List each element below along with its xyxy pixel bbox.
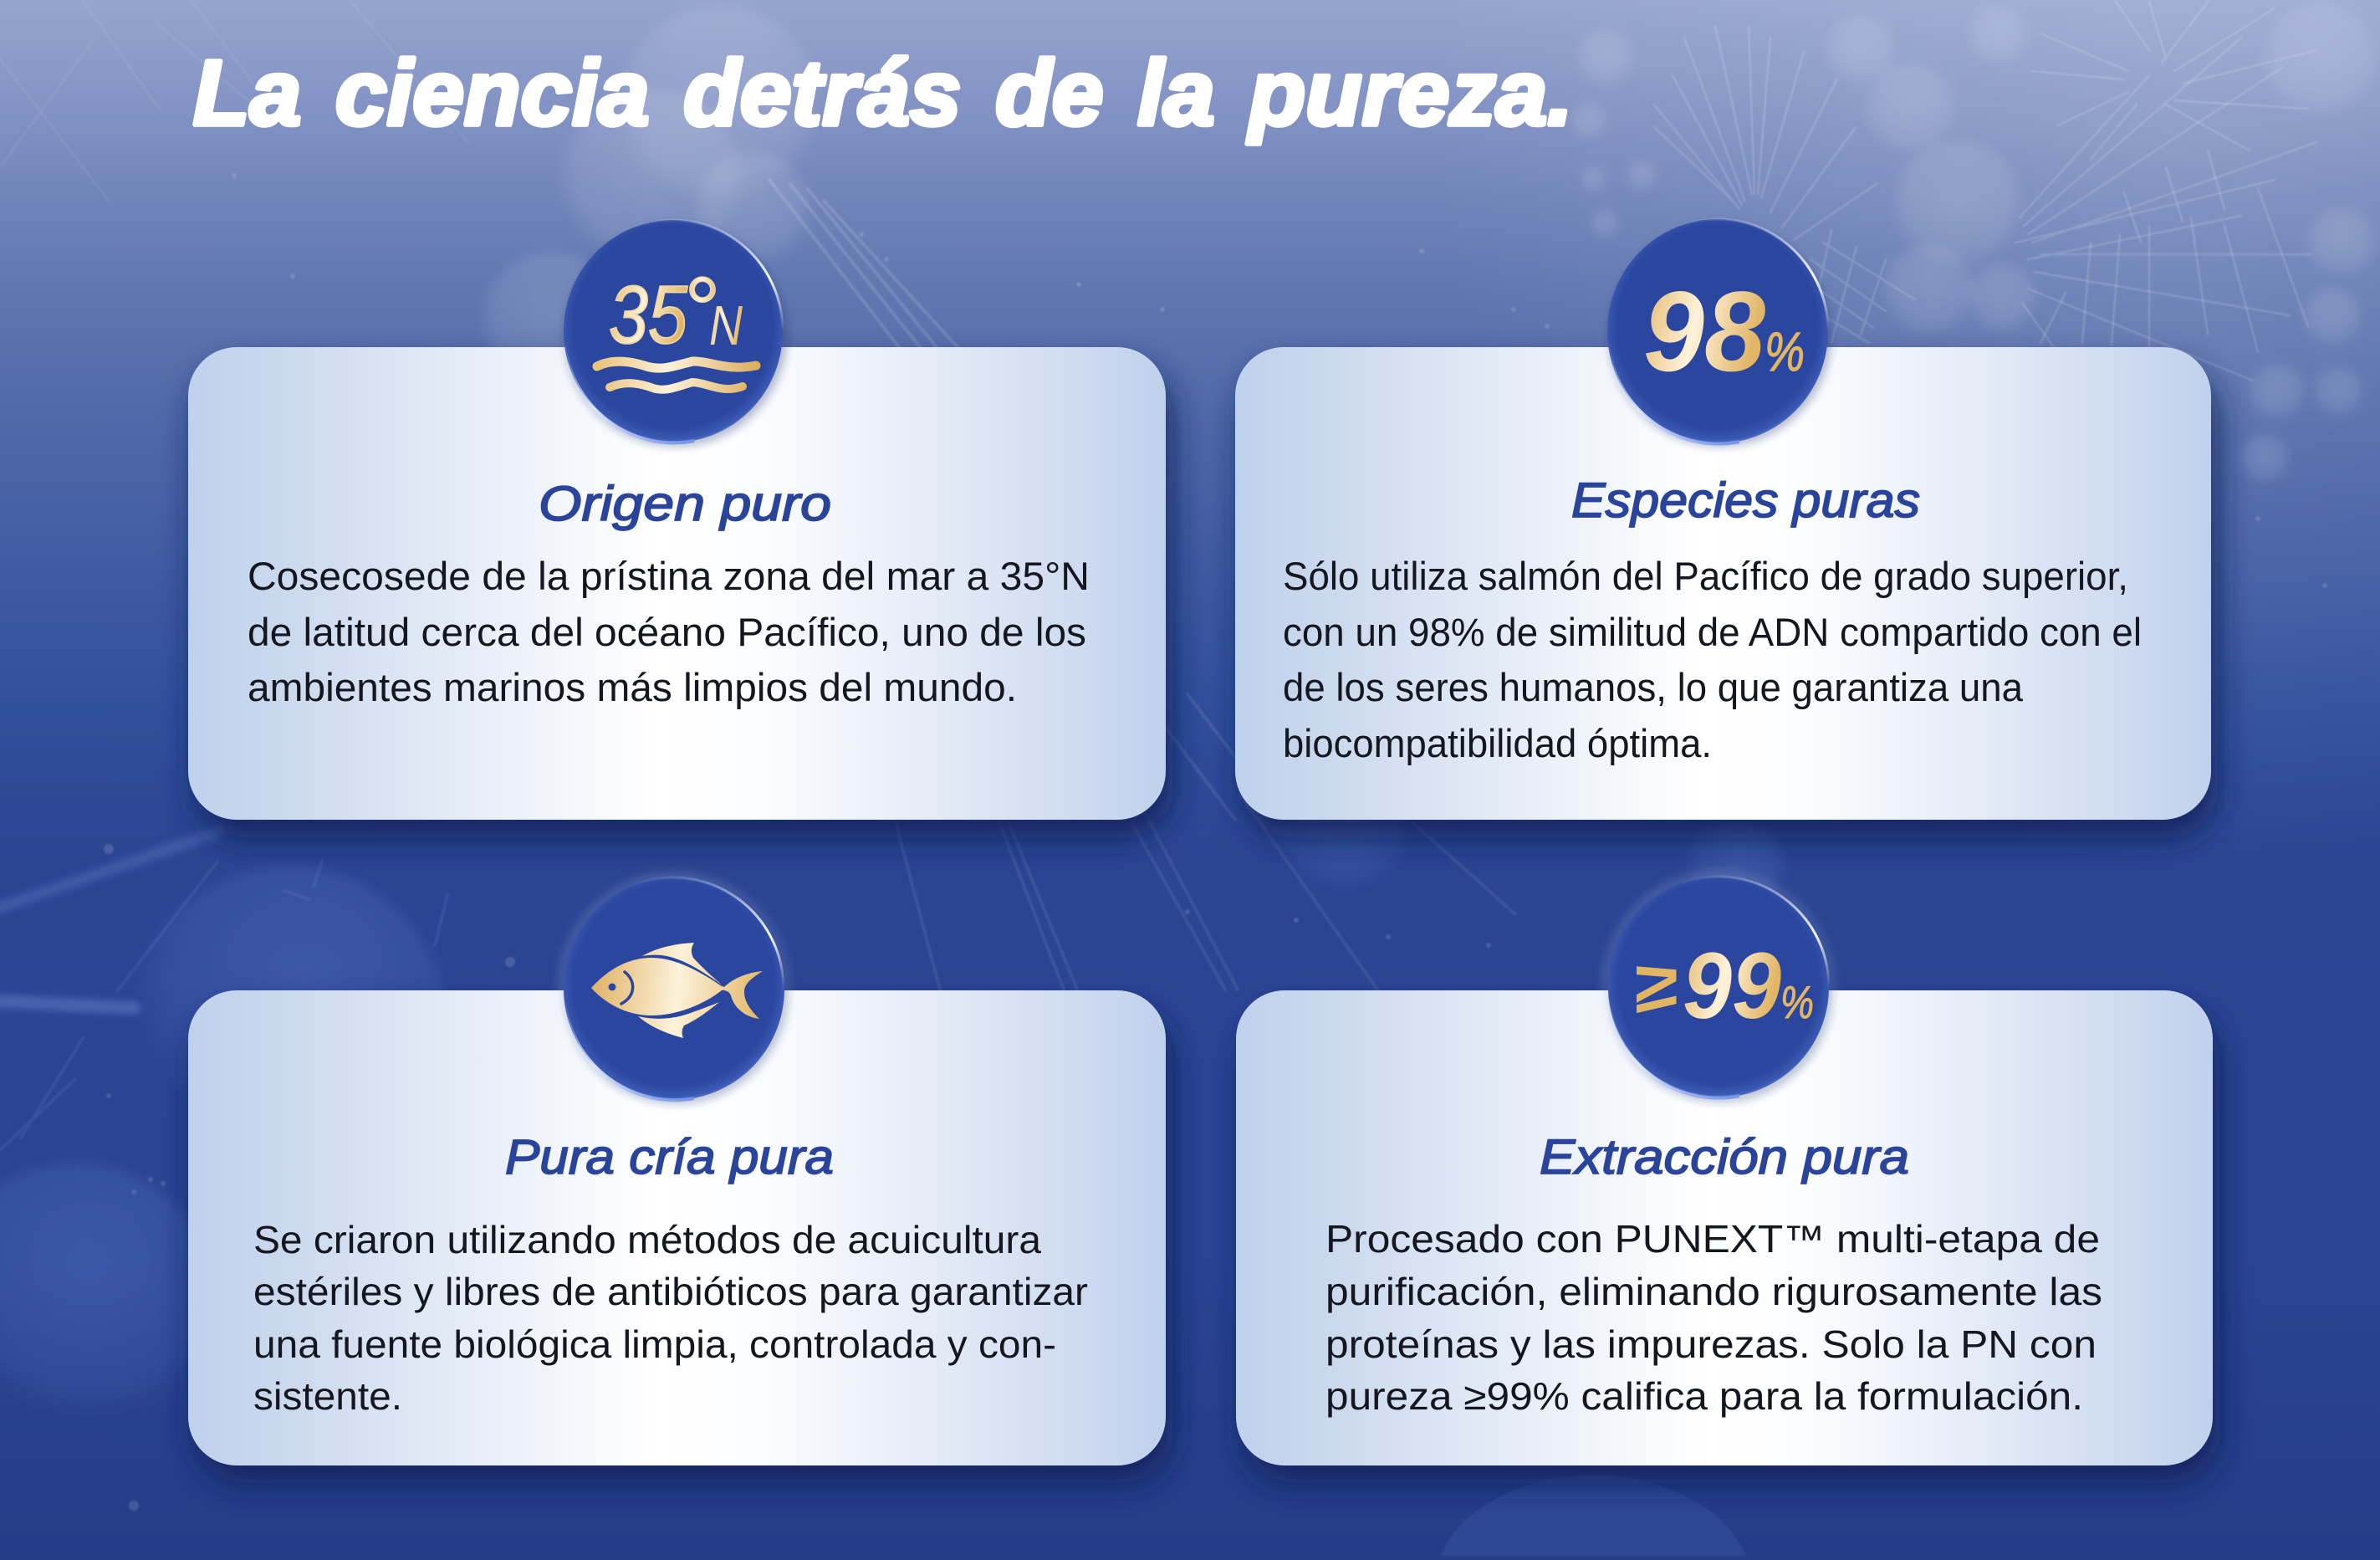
text block: origen puro: de latitud cerca del océano Pacífico, uno de los [248,611,1086,655]
icon: 35°N badge: ° [684,258,721,361]
text block: pura cría pura: una fuente biológica limpia, controlada y con- [253,1322,1056,1366]
text block: pura cría pura [253,1218,1088,1418]
fish [591,943,763,1038]
icon: ≥99% badge: ≥ [1633,937,1677,1030]
icon: 98% badge: % [1765,320,1805,382]
text block: extracción pura: purificación, eliminando rigurosamente las [1325,1270,2102,1313]
text block: pura cría pura: Se criaron utilizando métodos de acuicultura [253,1218,1041,1261]
icon: 98% badge [1607,219,1831,447]
text block: extracción pura [1325,1217,2102,1418]
icon: 35°N badge: N [709,294,743,357]
heading: especies puras: Especies puras [1571,473,1920,528]
icon: ≥99% badge [1601,870,1836,1104]
panel: origen puro [188,220,1172,838]
text block: especies puras: de los seres humanos, lo que garantiza una [1283,666,2024,710]
icon: fish badge [557,872,791,1106]
title: La ciencia detrás de la pureza. [193,42,1573,145]
text block: pura cría pura: sistente. [253,1374,402,1418]
icon: 35°N badge [564,220,787,447]
icon: ≥99% badge: 99 [1683,933,1781,1038]
text block: extracción pura: Procesado con PUNEXT™ multi-etapa de [1325,1217,2100,1261]
icon: 35°N badge: 35 [609,269,687,361]
icon: ≥99% badge: % [1780,976,1814,1028]
text block: origen puro: Cosecosede de la prístina zona del mar a 35°N [248,555,1090,599]
text block: extracción pura: proteínas y las impurezas. Solo la PN con [1325,1322,2097,1366]
icon: 98% badge: 98 [1643,268,1765,395]
panel: pura cría pura [188,872,1172,1483]
panel: especies puras [1235,219,2218,838]
lower molecule dome [1441,1475,1745,1556]
text block: especies puras: Sólo utiliza salmón del Pacífico de grado superior, [1283,555,2128,599]
text block: especies puras: biocompatibilidad óptima. [1283,722,1712,766]
heading: extracción pura: Extracción pura [1540,1130,1909,1184]
text block: origen puro: ambientes marinos más limpios del mundo. [248,666,1017,710]
panel: extracción pura [1236,870,2219,1483]
heading: pura cría pura: Pura cría pura [505,1130,834,1184]
text block: especies puras [1283,555,2142,766]
text block: especies puras: con un 98% de similitud de ADN compartido con el [1283,611,2142,655]
heading: origen puro: Origen puro [539,477,831,531]
text block: origen puro [248,555,1090,710]
text block: extracción pura: pureza ≥99% califica para la formulación. [1325,1374,2083,1418]
text block: pura cría pura: estériles y libres de antibióticos para garantizar [253,1270,1088,1313]
